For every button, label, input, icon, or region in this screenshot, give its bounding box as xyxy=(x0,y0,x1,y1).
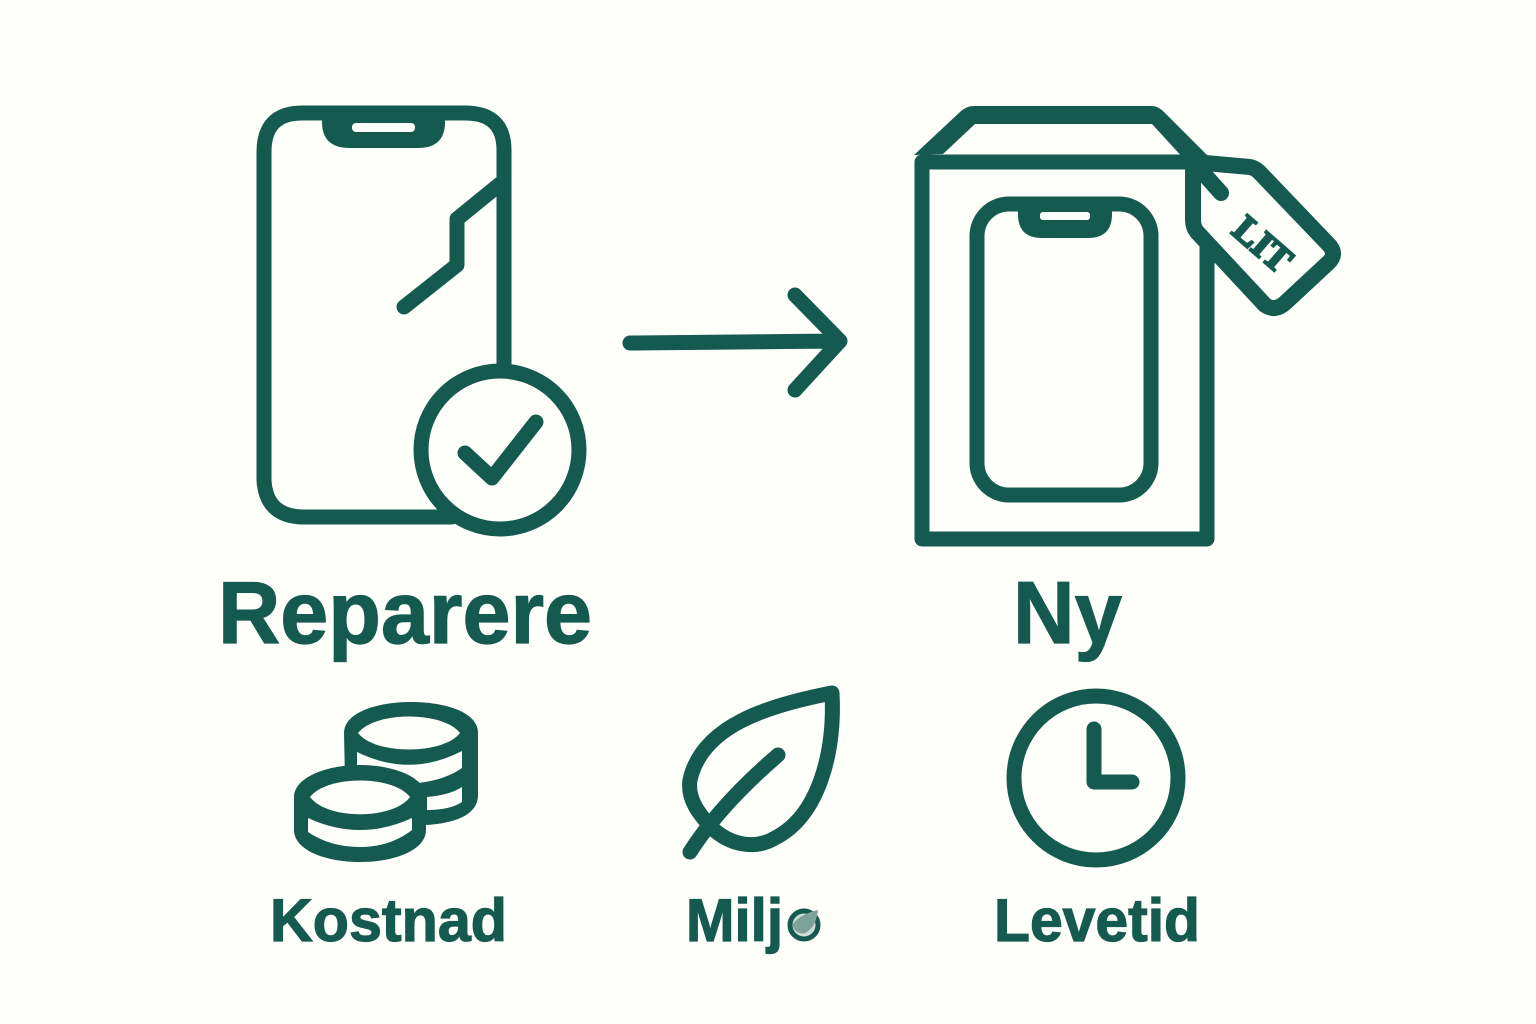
icon: clock xyxy=(1014,696,1178,860)
label: Miljø with small leaf glyph: Milj xyxy=(686,887,783,954)
icon: boxed new phone with price tag xyxy=(914,106,1333,539)
arrow: from repair to new xyxy=(630,295,840,390)
heading: Reparere: Reparere xyxy=(218,563,592,662)
icon: cracked phone with check mark xyxy=(264,113,579,529)
label: Levetid: Levetid xyxy=(994,887,1200,954)
heading: Ny: Ny xyxy=(1013,563,1122,662)
label: Kostnad: Kostnad xyxy=(270,887,507,954)
icon: leaf xyxy=(690,693,832,852)
icon: coins xyxy=(294,702,478,862)
icon: price tag: LIT xyxy=(1224,208,1300,282)
icon: price tag xyxy=(1193,163,1333,308)
